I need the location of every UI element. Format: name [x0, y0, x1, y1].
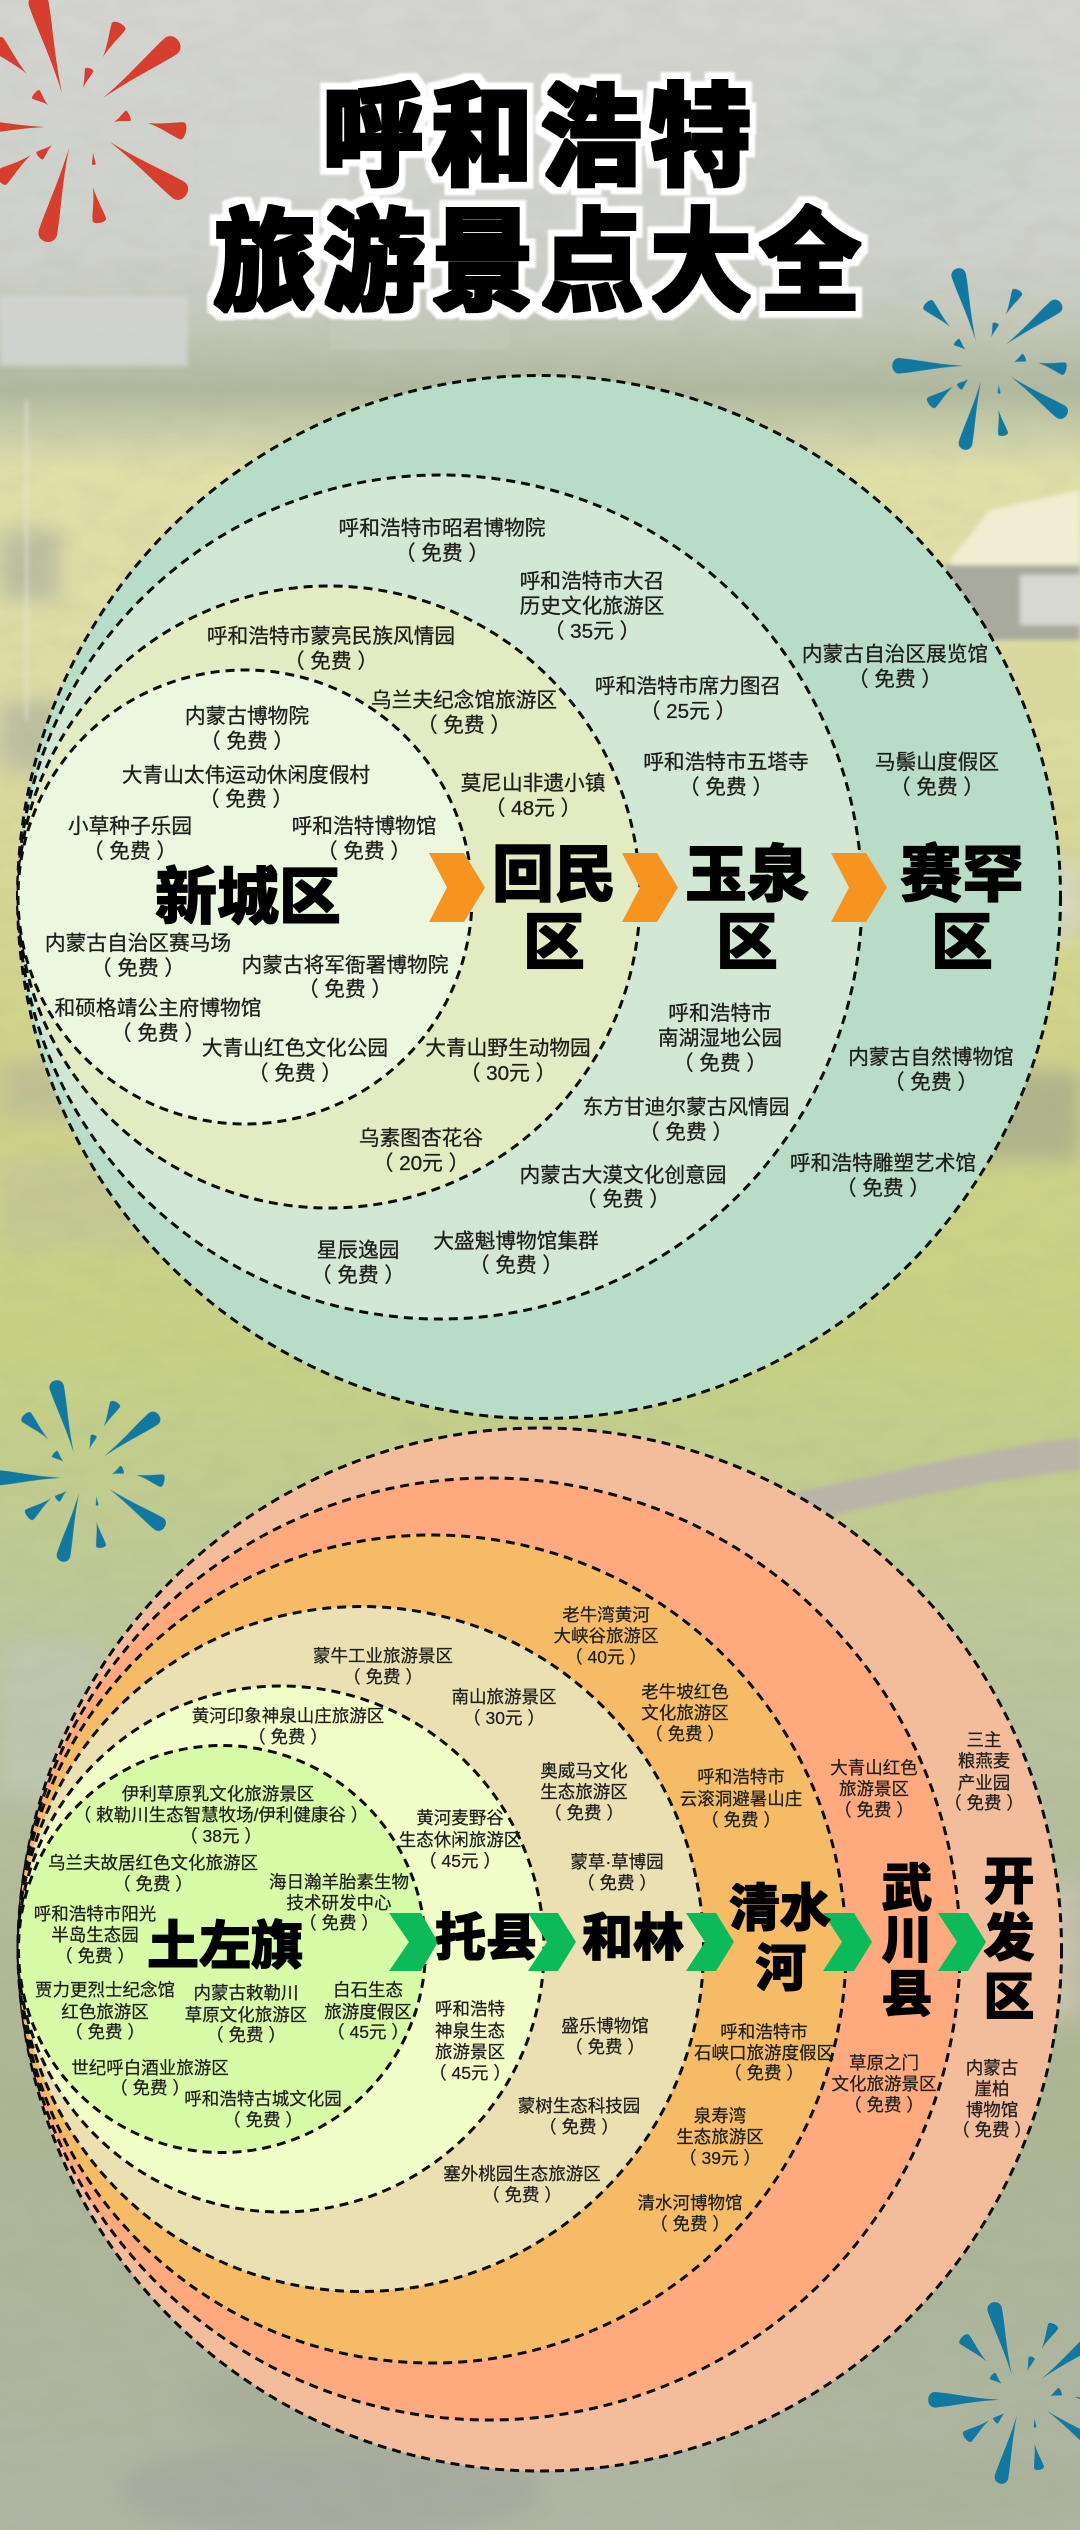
attraction labels: counties: 老牛湾黄河: [562, 1605, 650, 1625]
ring: 和林: [18, 1606, 704, 2292]
district labels: counties: 武: [881, 1860, 933, 1916]
attraction labels: urban: 历史文化旅游区: [520, 594, 664, 618]
district labels: counties: 发: [983, 1910, 1035, 1966]
attraction labels: urban: （ 免费 ）: [469, 1254, 563, 1276]
attraction labels: counties: （ 免费 ）: [539, 2117, 619, 2137]
attraction labels: urban: 星辰逸园: [317, 1238, 399, 1262]
attraction labels: urban: 呼和浩特市五塔寺: [643, 750, 809, 774]
attraction labels: counties: 大峡谷旅游区: [554, 1626, 658, 1646]
attraction labels: counties: （ 39元 ）: [679, 2148, 761, 2168]
attraction labels: counties: （ 免费 ）: [482, 2185, 562, 2205]
attraction labels: counties: 粮燕麦: [958, 1751, 1010, 1771]
attraction labels: counties: 文化旅游区: [641, 1703, 729, 1723]
attraction labels: counties: （ 免费 ）: [834, 1800, 914, 1820]
attraction labels: urban: 呼和浩特市蒙亮民族风情园: [207, 624, 455, 648]
title: 呼和浩特: [322, 75, 758, 200]
attraction labels: counties: 旅游景区: [839, 1779, 909, 1799]
ring: 开发区: [18, 1428, 1062, 2471]
attraction labels: counties: 崖柏: [974, 2079, 1010, 2099]
attraction labels: counties: 世纪呼白酒业旅游区: [71, 2058, 229, 2078]
attraction labels: urban: 呼和浩特市昭君博物院: [339, 516, 545, 540]
attraction labels: counties: 呼和浩特: [435, 1999, 505, 2019]
attraction labels: counties: 伊利草原乳文化旅游景区: [122, 1784, 314, 1804]
attraction labels: urban: （ 20元 ）: [373, 1152, 469, 1174]
attraction labels: counties: 内蒙古: [966, 2058, 1018, 2078]
attraction labels: counties: （ 免费 ）: [952, 2120, 1032, 2140]
attraction labels: counties: （ 免费 ）: [343, 1667, 423, 1687]
attraction labels: urban: 内蒙古自治区赛马场: [45, 932, 231, 954]
attraction labels: urban: （ 免费 ）: [890, 776, 984, 798]
attraction labels: urban: （ 30元 ）: [460, 1062, 556, 1084]
attraction labels: counties: （ 免费 ）: [645, 1724, 725, 1744]
attraction labels: urban: （ 免费 ）: [395, 542, 489, 564]
attraction labels: urban: 马鬃山度假区: [875, 750, 999, 774]
attraction labels: counties: 黄河印象神泉山庄旅游区: [192, 1706, 384, 1726]
attraction labels: counties: 草原之门: [849, 2053, 919, 2073]
attraction labels: counties: （ 免费 ）: [299, 1913, 379, 1933]
attraction labels: urban: （ 免费 ）: [311, 1264, 405, 1286]
attraction labels: urban: 内蒙古将军衙署博物院: [242, 954, 448, 976]
district labels: counties: [147, 1852, 1035, 2026]
attraction labels: urban: （ 48元 ）: [485, 796, 581, 820]
attraction labels: urban: 大盛魁博物馆集群: [433, 1230, 599, 1252]
ring: 托县: [18, 1686, 544, 2212]
attraction labels: counties: 神泉生态: [435, 2021, 505, 2041]
attraction labels: urban: 内蒙古自然博物馆: [848, 1046, 1014, 1068]
attraction labels: counties: （ 45元 ）: [419, 1851, 501, 1871]
attraction labels: counties: 旅游景区: [435, 2042, 505, 2062]
attraction labels: counties: 博物馆: [966, 2100, 1018, 2120]
district labels: urban: 回民: [492, 840, 616, 910]
ring: 赛罕区: [18, 376, 1060, 1418]
attraction labels: urban: 莫尼山非遗小镇: [461, 772, 605, 794]
district labels: counties: 开: [983, 1852, 1035, 1910]
attraction labels: urban: （ 免费 ）: [91, 956, 185, 980]
attraction labels: counties: 蒙草·草博园: [570, 1852, 664, 1872]
attraction labels: urban: （ 免费 ）: [317, 840, 411, 862]
attraction labels: counties: （ 免费 ）: [701, 1810, 781, 1830]
attraction labels: counties: 蒙牛工业旅游景区: [313, 1646, 453, 1666]
attraction labels: counties: （ 40元 ）: [565, 1647, 647, 1667]
attraction labels: urban: （ 25元 ）: [640, 700, 736, 722]
attraction labels: urban: （ 免费 ）: [248, 1062, 342, 1084]
attraction labels: counties: 老牛坡红色: [641, 1682, 729, 1702]
arrows: green chevrons: [389, 1913, 986, 1971]
district labels: counties: 和林: [582, 1910, 684, 1966]
attraction labels: counties: 生态旅游区: [540, 1782, 628, 1802]
attraction labels: urban: 小草种子乐园: [68, 814, 192, 838]
attraction labels: urban: 乌素图杏花谷: [359, 1126, 483, 1150]
attraction labels: counties: 大青山红色: [830, 1758, 918, 1778]
ring: 新城区: [18, 670, 472, 1124]
attraction labels: counties: 技术研发中心: [286, 1893, 392, 1913]
icon: red firework top-left: [0, 0, 192, 244]
attraction labels: urban: 呼和浩特雕塑艺术馆: [790, 1152, 976, 1174]
attraction labels: urban: 内蒙古自治区展览馆: [802, 642, 988, 666]
attraction labels: urban: 呼和浩特市席力图召: [595, 674, 781, 698]
attraction labels: counties: （ 免费 ）: [223, 2110, 303, 2130]
attraction labels: counties: 黄河麦野谷: [416, 1808, 504, 1828]
attraction labels: urban: （ 免费 ）: [199, 788, 293, 810]
panel: urban districts concentric circles: [18, 376, 1060, 1418]
title: 旅游景点大全: [214, 200, 868, 325]
attraction labels: urban: （ 免费 ）: [639, 1120, 733, 1144]
attraction labels: counties: 贾力更烈士纪念馆: [35, 1980, 175, 2000]
attraction labels: counties: 呼和浩特市阳光: [34, 1904, 156, 1924]
attraction labels: counties: 生态旅游区: [676, 2127, 764, 2147]
attraction labels: counties: （ 敕勒川生态智慧牧场/伊利健康谷 ）: [74, 1805, 368, 1825]
icon: blue firework bottom-right: [928, 2301, 1080, 2485]
attraction labels: counties: （ 30元 ）: [463, 1708, 545, 1728]
attraction labels: urban: （ 免费 ）: [83, 840, 177, 862]
attraction labels: counties: （ 38元 ）: [180, 1826, 262, 1846]
attraction labels: counties: （ 45元 ）: [327, 2022, 409, 2042]
attraction labels: counties: 旅游度假区: [324, 2002, 412, 2022]
attraction labels: counties: （ 免费 ）: [944, 1793, 1024, 1813]
attraction labels: urban: （ 免费 ）: [848, 668, 942, 690]
attraction labels: counties: （ 免费 ）: [55, 1946, 135, 1966]
attraction labels: counties: 红色旅游区: [61, 2002, 149, 2022]
attraction labels: counties: 半岛生态园: [51, 1925, 139, 1945]
attraction labels: counties: （ 免费 ）: [206, 2025, 286, 2045]
attraction labels: urban: 呼和浩特市大召: [520, 570, 664, 592]
attraction labels: urban: 大青山红色文化公园: [202, 1036, 388, 1060]
attraction labels: counties: 呼和浩特市: [720, 2022, 808, 2042]
attraction labels: counties: 三主: [966, 1730, 1002, 1750]
attraction labels: counties: 文化旅游景区: [832, 2074, 936, 2094]
district labels: urban: 区: [523, 908, 585, 978]
attraction labels: urban: （ 免费 ）: [576, 1188, 670, 1210]
attraction labels: urban: [45, 516, 1014, 1286]
attraction labels: counties: （ 免费 ）: [577, 1873, 657, 1893]
attraction labels: counties: 产业园: [958, 1773, 1010, 1793]
attraction labels: counties: 蒙树生态科技园: [518, 2096, 640, 2116]
district labels: urban: 玉泉: [685, 840, 809, 910]
attraction labels: urban: 东方甘迪尔蒙古风情园: [583, 1096, 789, 1118]
district labels: urban: 新城区: [155, 864, 341, 932]
attraction labels: counties: 乌兰夫故居红色文化旅游区: [48, 1853, 258, 1873]
district labels: counties: 清水: [729, 1880, 831, 1936]
attraction labels: urban: （ 35元 ）: [544, 620, 640, 642]
ring: 武川县: [18, 1478, 960, 2420]
attraction labels: urban: （ 免费 ）: [284, 650, 378, 672]
attraction labels: urban: 大青山太伟运动休闲度假村: [122, 764, 370, 786]
panel: county districts concentric circles: [18, 1428, 1062, 2471]
district labels: counties: 土左旗: [147, 1918, 303, 1976]
attraction labels: counties: 呼和浩特古城文化园: [184, 2089, 342, 2109]
ring: 土左旗: [18, 1746, 426, 2152]
attraction labels: urban: （ 免费 ）: [679, 776, 773, 798]
district labels: urban: 区: [716, 908, 778, 978]
ring: 玉泉区: [18, 475, 862, 1319]
district labels: counties: 区: [983, 1968, 1035, 2026]
attraction labels: counties: [34, 1605, 1032, 2234]
attraction labels: urban: （ 免费 ）: [417, 714, 511, 736]
attraction labels: urban: （ 免费 ）: [884, 1070, 978, 1094]
attraction labels: counties: 奥威马文化: [540, 1761, 628, 1781]
attraction labels: counties: （ 免费 ）: [113, 1874, 193, 1894]
district labels: urban: [155, 840, 1024, 978]
ring: 清水河: [18, 1535, 846, 2363]
attraction labels: counties: （ 免费 ）: [65, 2022, 145, 2042]
attraction labels: urban: 乌兰夫纪念馆旅游区: [371, 688, 557, 712]
district labels: counties: 县: [881, 1966, 933, 2022]
attraction labels: counties: 盛乐博物馆: [561, 2016, 649, 2036]
attraction labels: urban: （ 免费 ）: [200, 730, 294, 752]
attraction labels: counties: 海日瀚羊胎素生物: [269, 1872, 409, 1892]
attraction labels: counties: 内蒙古敕勒川: [194, 1983, 298, 2003]
attraction labels: counties: 泉寿湾: [694, 2106, 746, 2126]
attraction labels: counties: （ 免费 ）: [110, 2078, 190, 2098]
attraction labels: urban: （ 免费 ）: [298, 978, 392, 1000]
district labels: urban: 区: [931, 908, 993, 978]
attraction labels: urban: 呼和浩特博物馆: [292, 814, 436, 838]
attraction labels: counties: 塞外桃园生态旅游区: [443, 2164, 601, 2184]
district labels: counties: 托县: [435, 1910, 537, 1966]
attraction labels: counties: （ 免费 ）: [544, 1803, 624, 1823]
attraction labels: counties: 生态休闲旅游区: [399, 1830, 521, 1850]
icon: blue firework top-right: [892, 267, 1071, 451]
attraction labels: urban: （ 免费 ）: [836, 1176, 930, 1200]
title: [214, 75, 868, 325]
attraction labels: counties: 草原文化旅游区: [185, 2005, 307, 2025]
attraction labels: counties: （ 免费 ）: [844, 2095, 924, 2115]
attraction labels: counties: 白石生态: [333, 1980, 403, 2000]
arrows: orange chevrons: [429, 853, 887, 922]
attraction labels: counties: （ 免费 ）: [248, 1727, 328, 1747]
icon: blue firework middle-left: [0, 1379, 169, 1563]
attraction labels: urban: （ 免费 ）: [111, 1022, 205, 1044]
attraction labels: counties: （ 免费 ）: [565, 2037, 645, 2057]
attraction labels: counties: 石峡口旅游度假区: [694, 2043, 834, 2063]
attraction labels: urban: 大青山野生动物园: [425, 1036, 591, 1060]
district labels: counties: 川: [881, 1912, 933, 1968]
attraction labels: urban: 南湖湿地公园: [658, 1026, 782, 1050]
attraction labels: counties: （ 免费 ）: [724, 2063, 804, 2083]
attraction labels: counties: 云滚洞避暑山庄: [680, 1789, 802, 1809]
district labels: counties: 河: [755, 1940, 807, 1996]
attraction labels: counties: （ 45元 ）: [429, 2063, 511, 2083]
attraction labels: counties: 清水河博物馆: [638, 2193, 742, 2213]
attraction labels: urban: 呼和浩特市: [668, 1002, 772, 1024]
attraction labels: urban: 内蒙古博物院: [185, 704, 309, 728]
ring: 回民区: [18, 586, 640, 1208]
attraction labels: counties: （ 免费 ）: [650, 2214, 730, 2234]
district labels: urban: 赛罕: [900, 840, 1024, 910]
attraction labels: urban: 内蒙古大漠文化创意园: [520, 1164, 726, 1186]
attraction labels: counties: 呼和浩特市: [697, 1767, 785, 1787]
attraction labels: urban: 和硕格靖公主府博物馆: [55, 996, 261, 1020]
attraction labels: urban: （ 免费 ）: [673, 1052, 767, 1074]
attraction labels: counties: 南山旅游景区: [452, 1687, 556, 1707]
